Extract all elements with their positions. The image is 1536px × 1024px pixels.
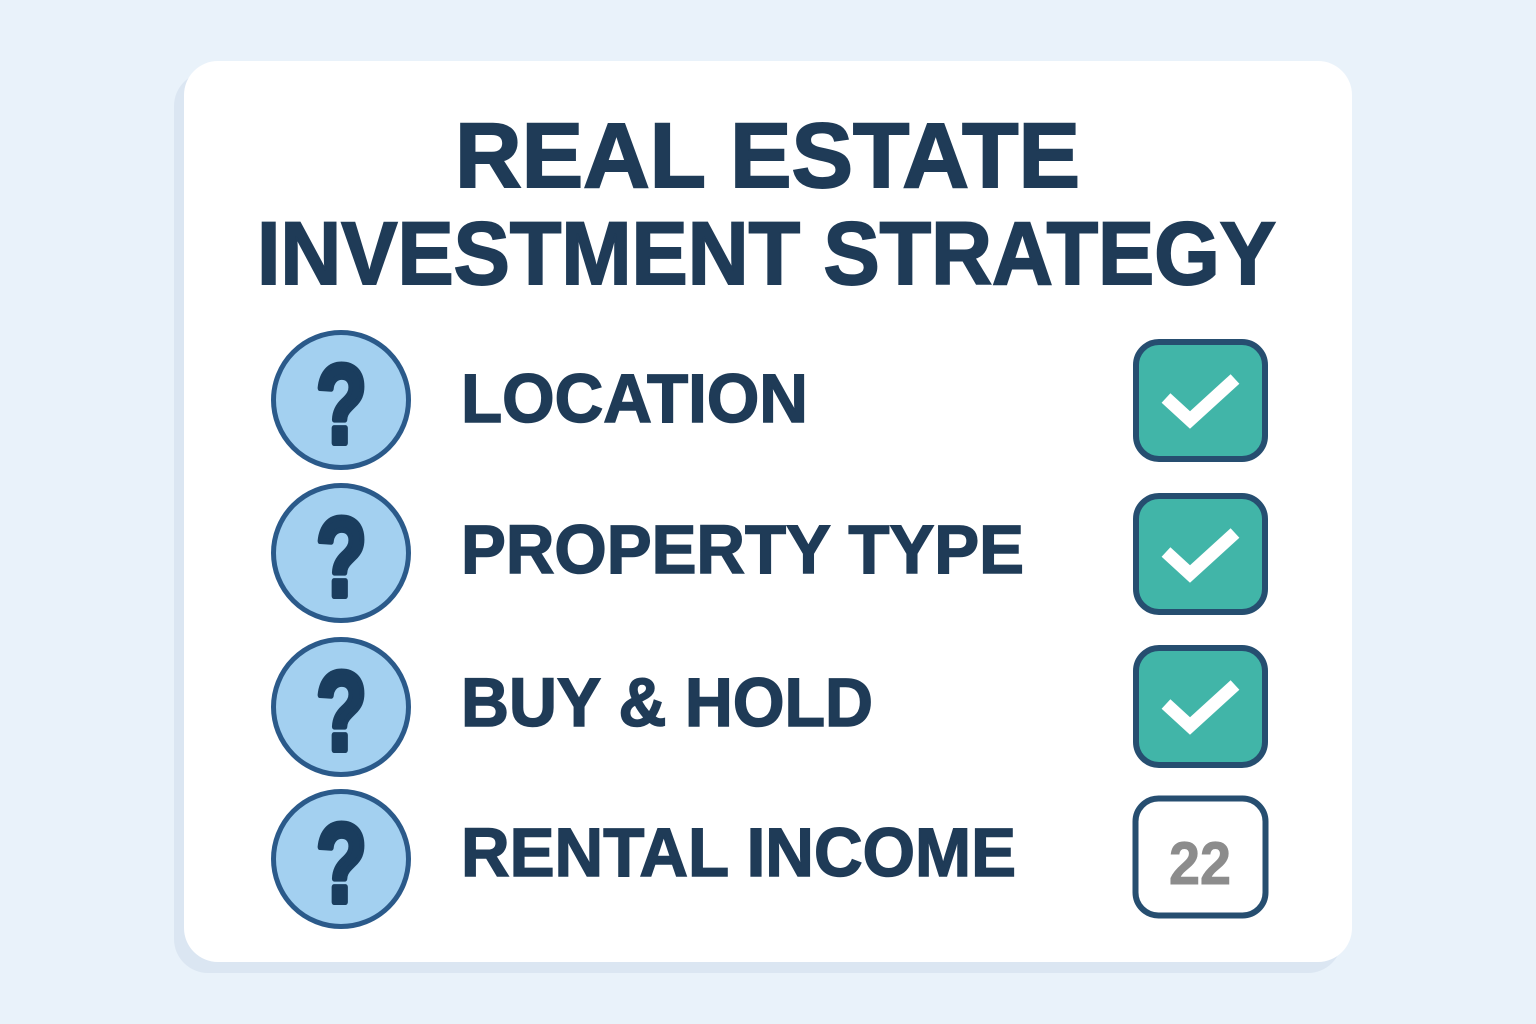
icon: question mark circle <box>274 332 408 468</box>
label: property type: PROPERTY TYPE <box>461 511 1024 588</box>
icon: checked box <box>1136 496 1265 612</box>
icon: question mark circle <box>274 640 408 774</box>
panel: main card <box>184 61 1352 962</box>
row: location <box>274 332 1265 468</box>
title <box>257 105 1276 303</box>
icon: question mark circle <box>274 792 408 926</box>
label: rental income: RENTAL INCOME <box>461 814 1016 891</box>
row: buy and hold <box>274 640 1265 774</box>
card shadow <box>174 72 1342 973</box>
row: rental income <box>274 792 1266 926</box>
label: buy and hold: BUY & HOLD <box>461 664 873 741</box>
icon: checked box <box>1136 342 1265 459</box>
icon: checked box <box>1136 648 1265 765</box>
icon: question mark circle: ? <box>316 342 367 467</box>
icon: number box <box>1136 798 1266 916</box>
title: INVESTMENT STRATEGY <box>257 203 1276 303</box>
icon: question mark circle: ? <box>316 801 367 926</box>
label: location: LOCATION <box>461 360 808 437</box>
icon: question mark circle: ? <box>316 495 367 620</box>
title: REAL ESTATE <box>455 105 1080 207</box>
icon: question mark circle: ? <box>316 649 367 774</box>
row: property type <box>274 486 1265 620</box>
icon: number box: 22 <box>1169 830 1231 897</box>
icon: question mark circle <box>274 486 408 620</box>
